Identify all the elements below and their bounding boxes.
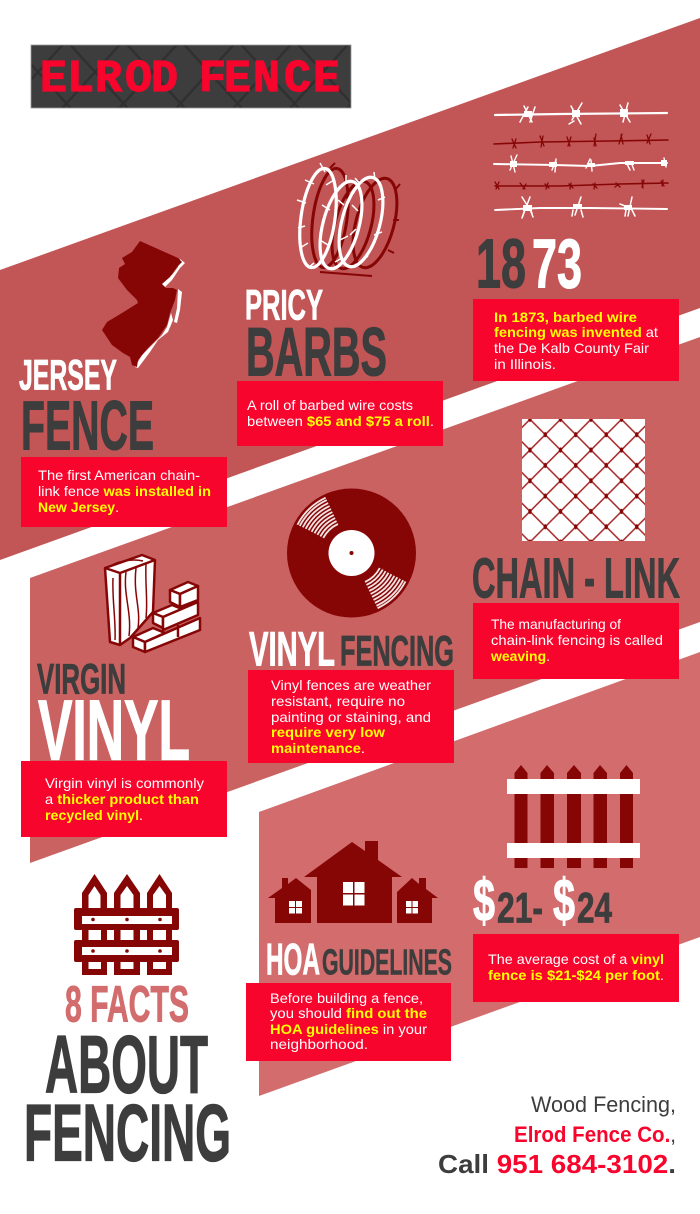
icon: barbed wire coil — [294, 163, 405, 276]
callout: 1873 — [473, 299, 679, 381]
callout: Virgin Vinyl: recycled vinyl. — [45, 807, 143, 823]
callout: Vinyl Fencing: maintenance . — [271, 740, 365, 756]
heading: price range — [473, 867, 612, 934]
callout: Chain-Link — [473, 603, 679, 679]
background band: top — [0, 18, 700, 560]
title: 8 Facts About Fencing: 8 FACTS — [65, 976, 189, 1032]
callout: 1873: In 1873, barbed wire — [494, 309, 637, 325]
callout: Virgin Vinyl: Virgin vinyl is commonly — [45, 775, 204, 791]
callout: HOA Guidelines: neighborhood. — [270, 1036, 368, 1052]
heading: Virgin Vinyl: VIRGIN — [37, 656, 126, 704]
heading: Jersey Fence — [19, 352, 154, 464]
callout: Virgin Vinyl: a thicker product than — [45, 791, 199, 807]
title: 8 Facts About Fencing — [24, 976, 231, 1178]
heading: HOA Guidelines — [266, 936, 452, 984]
heading: 1873: 18 — [476, 224, 526, 302]
heading: Virgin Vinyl: VINYL — [38, 684, 190, 778]
contact block: Call 951 684-3102 . — [438, 1149, 676, 1179]
callout: Virgin Vinyl — [21, 761, 227, 837]
heading: price range: $ — [553, 867, 575, 934]
callout: Vinyl Fencing: resistant, require no — [271, 693, 405, 709]
heading: Vinyl Fencing: VINYL — [249, 624, 335, 676]
background band: middle — [30, 337, 700, 863]
heading: Vinyl Fencing: FENCING — [340, 628, 454, 676]
heading: price range: 24 — [577, 886, 612, 932]
callout: price range: fence is $21-$24 per foot . — [488, 967, 664, 983]
callout: HOA Guidelines: HOA guidelines in your — [270, 1021, 427, 1037]
background band: bottom — [259, 652, 700, 1096]
callout: Jersey Fence: link fence was installed in — [38, 483, 211, 499]
heading: Vinyl Fencing — [249, 624, 454, 676]
heading: Virgin Vinyl — [37, 656, 190, 778]
callout: price range — [473, 934, 679, 1002]
heading: HOA Guidelines: GUIDELINES — [322, 942, 452, 982]
heading: price range: $ — [473, 867, 495, 934]
icon: vinyl record — [269, 471, 434, 635]
heading: Pricy Barbs — [245, 282, 387, 390]
icon: New Jersey state — [102, 241, 185, 368]
callout: Pricy Barbs — [237, 381, 443, 446]
callout: Jersey Fence — [21, 457, 227, 527]
callout: HOA Guidelines — [246, 983, 451, 1061]
icon: chain-link mesh — [522, 419, 645, 541]
icon: barbed wire strands — [494, 103, 668, 218]
heading: 1873: 73 — [532, 224, 582, 302]
callout: 1873: the De Kalb County Fair — [494, 340, 649, 356]
callout: Vinyl Fencing: Vinyl fences are weather — [271, 677, 431, 693]
callout: 1873: in Illinois. — [494, 356, 556, 372]
heading: price range: 21- — [497, 886, 543, 932]
callout: Chain-Link: The manufacturing of — [491, 616, 621, 632]
contact block: Elrod Fence Co., — [514, 1122, 676, 1147]
callout: Pricy Barbs: A roll of barbed wire costs — [247, 397, 413, 413]
callout: HOA Guidelines: you should find out the — [270, 1005, 427, 1021]
icon: fence title emblem — [74, 874, 179, 975]
heading: Pricy Barbs: BARBS — [246, 314, 387, 390]
heading: HOA Guidelines: HOA — [266, 936, 320, 984]
title: 8 Facts About Fencing: ABOUT — [45, 1020, 208, 1110]
heading: Jersey Fence: JERSEY — [19, 352, 117, 400]
callout: price range: The average cost of a vinyl — [488, 951, 664, 967]
callout: Chain-Link: weaving. — [490, 648, 550, 664]
callout: Vinyl Fencing: painting or staining, and — [271, 709, 431, 725]
callout: Vinyl Fencing: require very low — [271, 724, 385, 740]
callout: 1873: fencing was invented at — [494, 324, 658, 340]
icon: three houses — [268, 841, 438, 923]
callout: HOA Guidelines: Before building a fence, — [270, 990, 423, 1006]
callout: Vinyl Fencing — [248, 670, 454, 763]
heading: Pricy Barbs: PRICY — [245, 282, 323, 330]
callout: Pricy Barbs: between $65 and $75 a roll . — [247, 413, 434, 429]
logo: Elrod Fence: ELROD FENCE — [40, 54, 340, 105]
callout: Chain-Link: chain-link fencing is called — [491, 632, 663, 648]
icon: wood block and bricks — [105, 555, 200, 652]
callout: Jersey Fence: The first American chain- — [38, 467, 200, 483]
callout: Jersey Fence: New Jersey. — [38, 499, 119, 515]
contact block: Wood Fencing, — [531, 1092, 676, 1117]
icon: picket fence section — [507, 765, 640, 868]
contact block — [438, 1092, 676, 1179]
title: 8 Facts About Fencing: FENCING — [24, 1088, 231, 1178]
heading: Jersey Fence: FENCE — [21, 386, 154, 464]
